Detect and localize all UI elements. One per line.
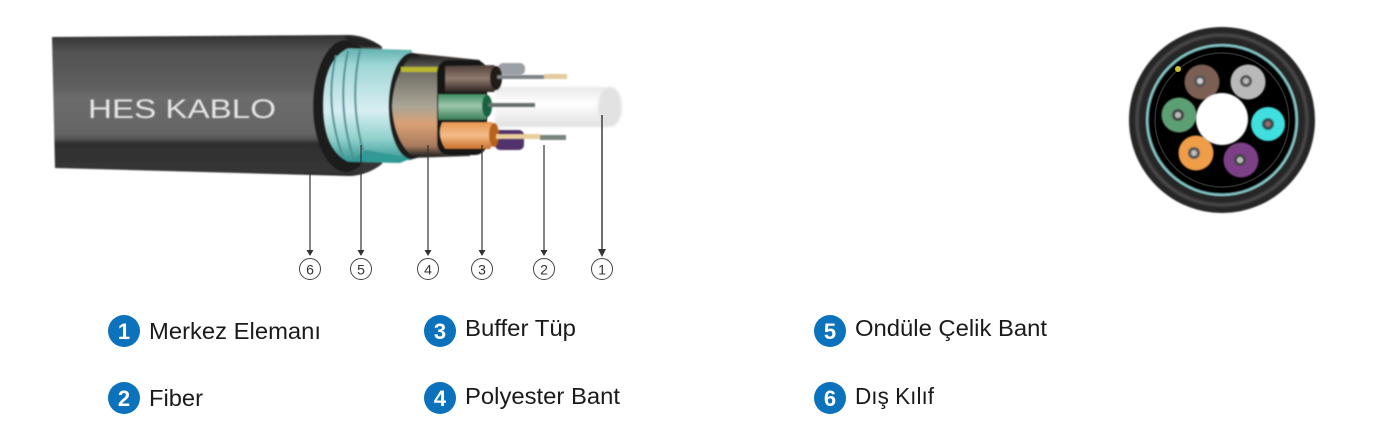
legend 2: Fiber: 2: [118, 386, 130, 411]
legend 3: Buffer Tüp: Buffer Tüp: [465, 315, 576, 341]
callout 3: [472, 145, 492, 280]
tube: purple: [1224, 142, 1258, 178]
legend 6: Dış Kılıf: Dış Kılıf: [855, 383, 935, 409]
legend 4: Polyester Bant: [424, 382, 621, 414]
outer sheath: [1129, 27, 1315, 213]
tube: brown: [1184, 64, 1220, 100]
callout 1: 1: [598, 262, 606, 278]
tube: cyan: [1251, 107, 1285, 141]
cable illustration: [52, 35, 622, 176]
rear tubes: [495, 63, 525, 150]
tube: gray: [1230, 64, 1266, 100]
cable print: HES KABLO: [88, 94, 276, 124]
legend 1: Merkez Elemanı: 1: [118, 319, 130, 344]
callout 1: [592, 115, 612, 280]
cable outer jacket: [52, 35, 382, 176]
buffer tubes: [438, 65, 502, 149]
legend 4: Polyester Bant: 4: [434, 386, 447, 411]
legend 5: Ondüle Çelik Bant: Ondüle Çelik Bant: [855, 315, 1048, 341]
callout 3: 3: [478, 262, 486, 278]
center member: [1196, 93, 1248, 145]
polyester tape: [389, 53, 487, 159]
yellow marker: [1175, 66, 1181, 72]
optical fibers: [488, 74, 567, 140]
legend 6: Dış Kılıf: 6: [824, 386, 836, 411]
callout 5: [350, 145, 372, 280]
callout 2: 2: [540, 262, 548, 278]
center strength member: [495, 87, 622, 127]
legend 5: Ondüle Çelik Bant: [814, 315, 1048, 347]
jacket shoulder: [344, 36, 382, 47]
legend 4: Polyester Bant: Polyester Bant: [465, 383, 621, 409]
tube: orange: [1178, 136, 1214, 170]
legend 3: Buffer Tüp: 3: [434, 319, 446, 344]
legend 1: Merkez Elemanı: Merkez Elemanı: [149, 318, 321, 344]
callout 6: [300, 145, 320, 280]
callout 4: 4: [424, 262, 432, 278]
legend 5: Ondüle Çelik Bant: 5: [824, 319, 836, 344]
callout 6: 6: [306, 262, 314, 278]
callout 4: [418, 145, 438, 280]
cross-section: [1129, 27, 1315, 213]
tube: green: [1162, 98, 1196, 132]
legend 2: Fiber: Fiber: [149, 385, 203, 411]
legend 6: Dış Kılıf: [814, 382, 935, 414]
corrugated steel tape: [323, 48, 412, 163]
callout 2: [534, 145, 554, 280]
legend 1: Merkez Elemanı: [108, 315, 321, 347]
callout 5: 5: [357, 262, 365, 278]
steel ring: [1147, 45, 1297, 195]
legend 3: Buffer Tüp: [424, 315, 576, 347]
legend 2: Fiber: [108, 382, 203, 414]
